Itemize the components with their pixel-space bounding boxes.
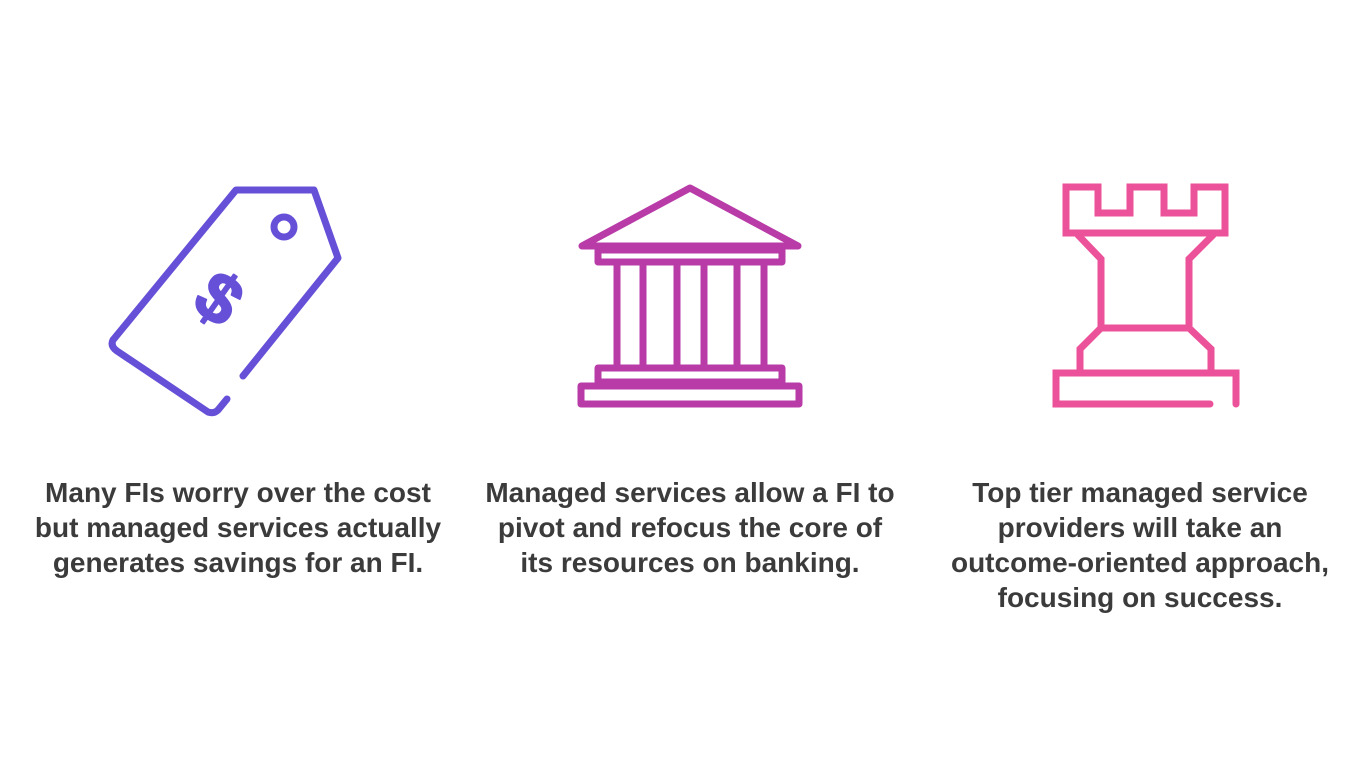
text: column 3: Top tier managed service [972, 477, 1308, 508]
text: column 1 [35, 477, 441, 578]
icon: bank [581, 188, 799, 404]
text: column 2: pivot and refocus the core of [498, 512, 882, 543]
text: column 3 [951, 477, 1329, 613]
text: column 3: focusing on success. [998, 582, 1282, 613]
icon: price tag [112, 190, 338, 413]
text: column 2: its resources on banking. [520, 547, 860, 578]
text: column 3: providers will take an [998, 512, 1282, 543]
text: column 1: generates savings for an FI. [53, 547, 423, 578]
text: column 2 [485, 477, 895, 578]
icon: rook [1056, 187, 1236, 404]
text: column 2: Managed services allow a FI to [485, 477, 895, 508]
icon: price tag: $ [181, 255, 257, 341]
text: column 3: outcome-oriented approach, [951, 547, 1329, 578]
text: column 1: but managed services actually [35, 512, 441, 543]
text: column 1: Many FIs worry over the cost [45, 477, 431, 508]
